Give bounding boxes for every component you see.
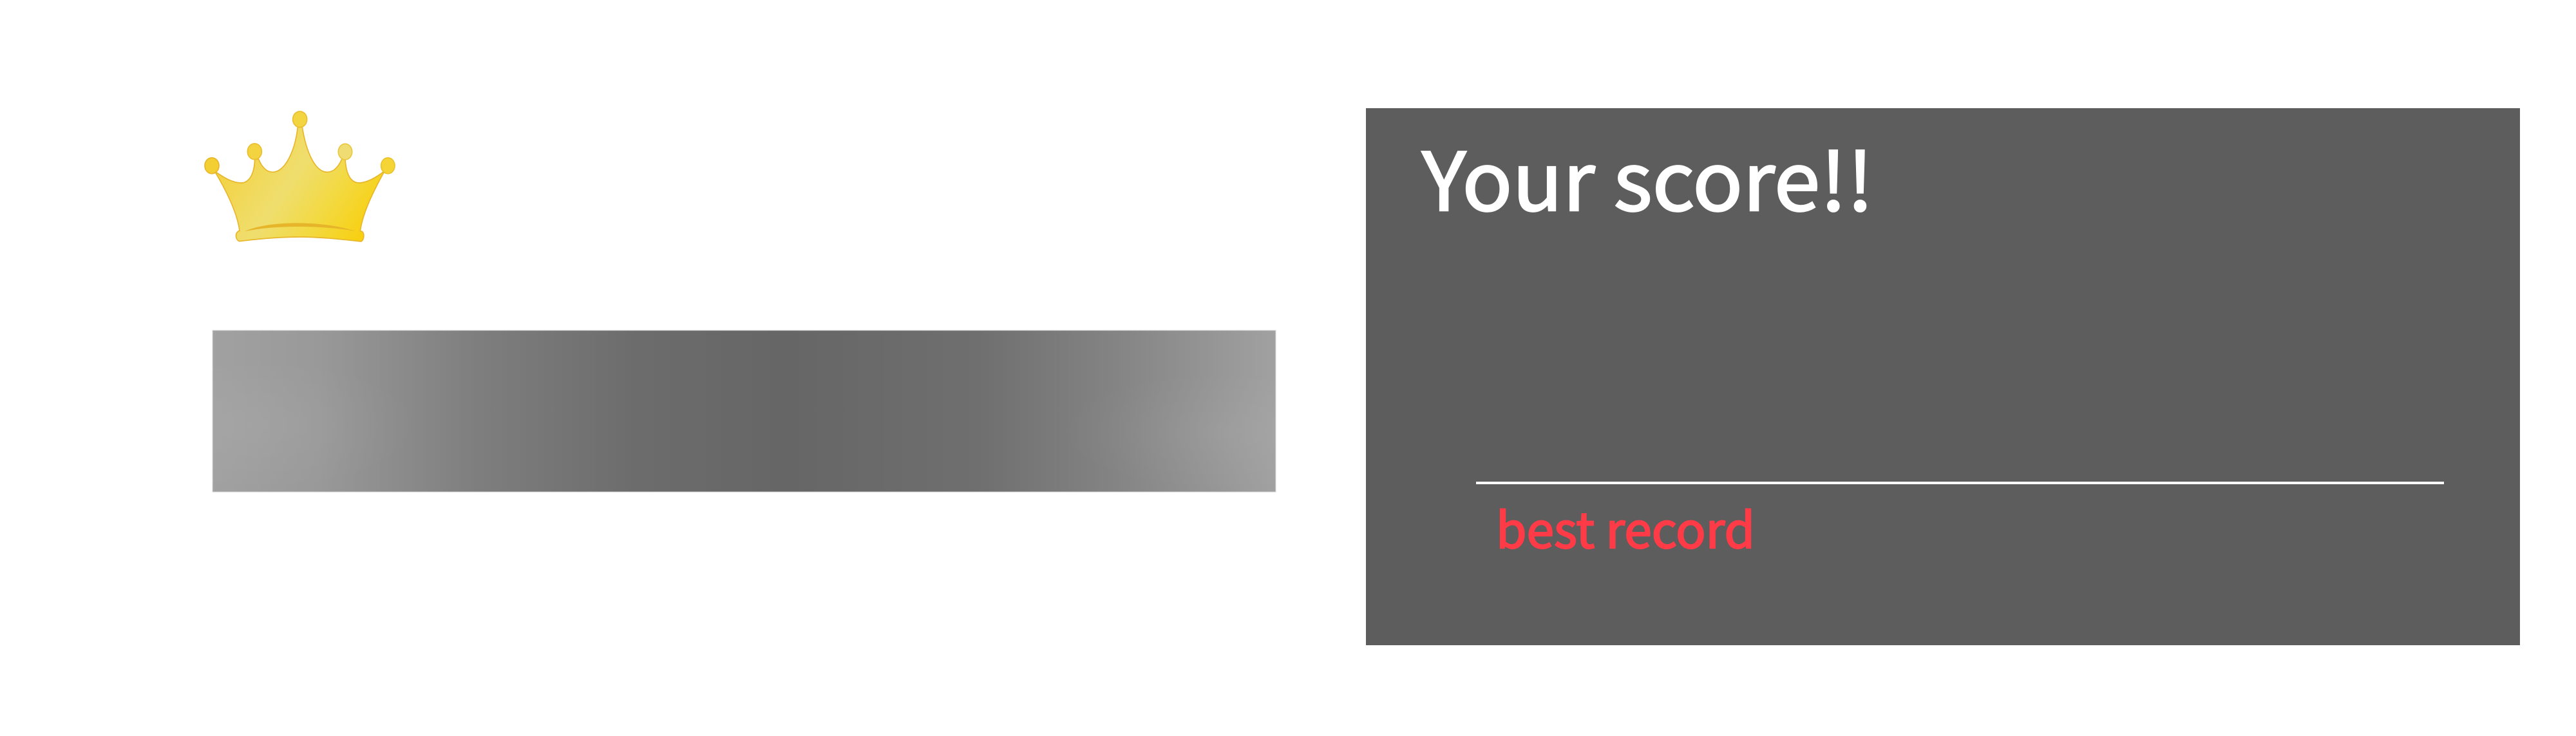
crown ball 5: [381, 158, 395, 174]
heading: your score: Your score!!: [1421, 117, 1873, 234]
score underline: [1476, 482, 2444, 484]
panel background: [1366, 108, 2520, 645]
gradient bar: [90, 330, 1391, 492]
crown ball 2: [247, 144, 261, 160]
crown ball 4: [338, 144, 352, 160]
crown body: [214, 127, 384, 241]
crown ball 1: [205, 158, 219, 174]
panel: score: [1366, 108, 2520, 645]
crown ball 3: [293, 111, 307, 127]
crown band highlight: [245, 223, 355, 231]
icon: crown: [205, 111, 395, 241]
label: best record: best record: [1496, 491, 1755, 562]
